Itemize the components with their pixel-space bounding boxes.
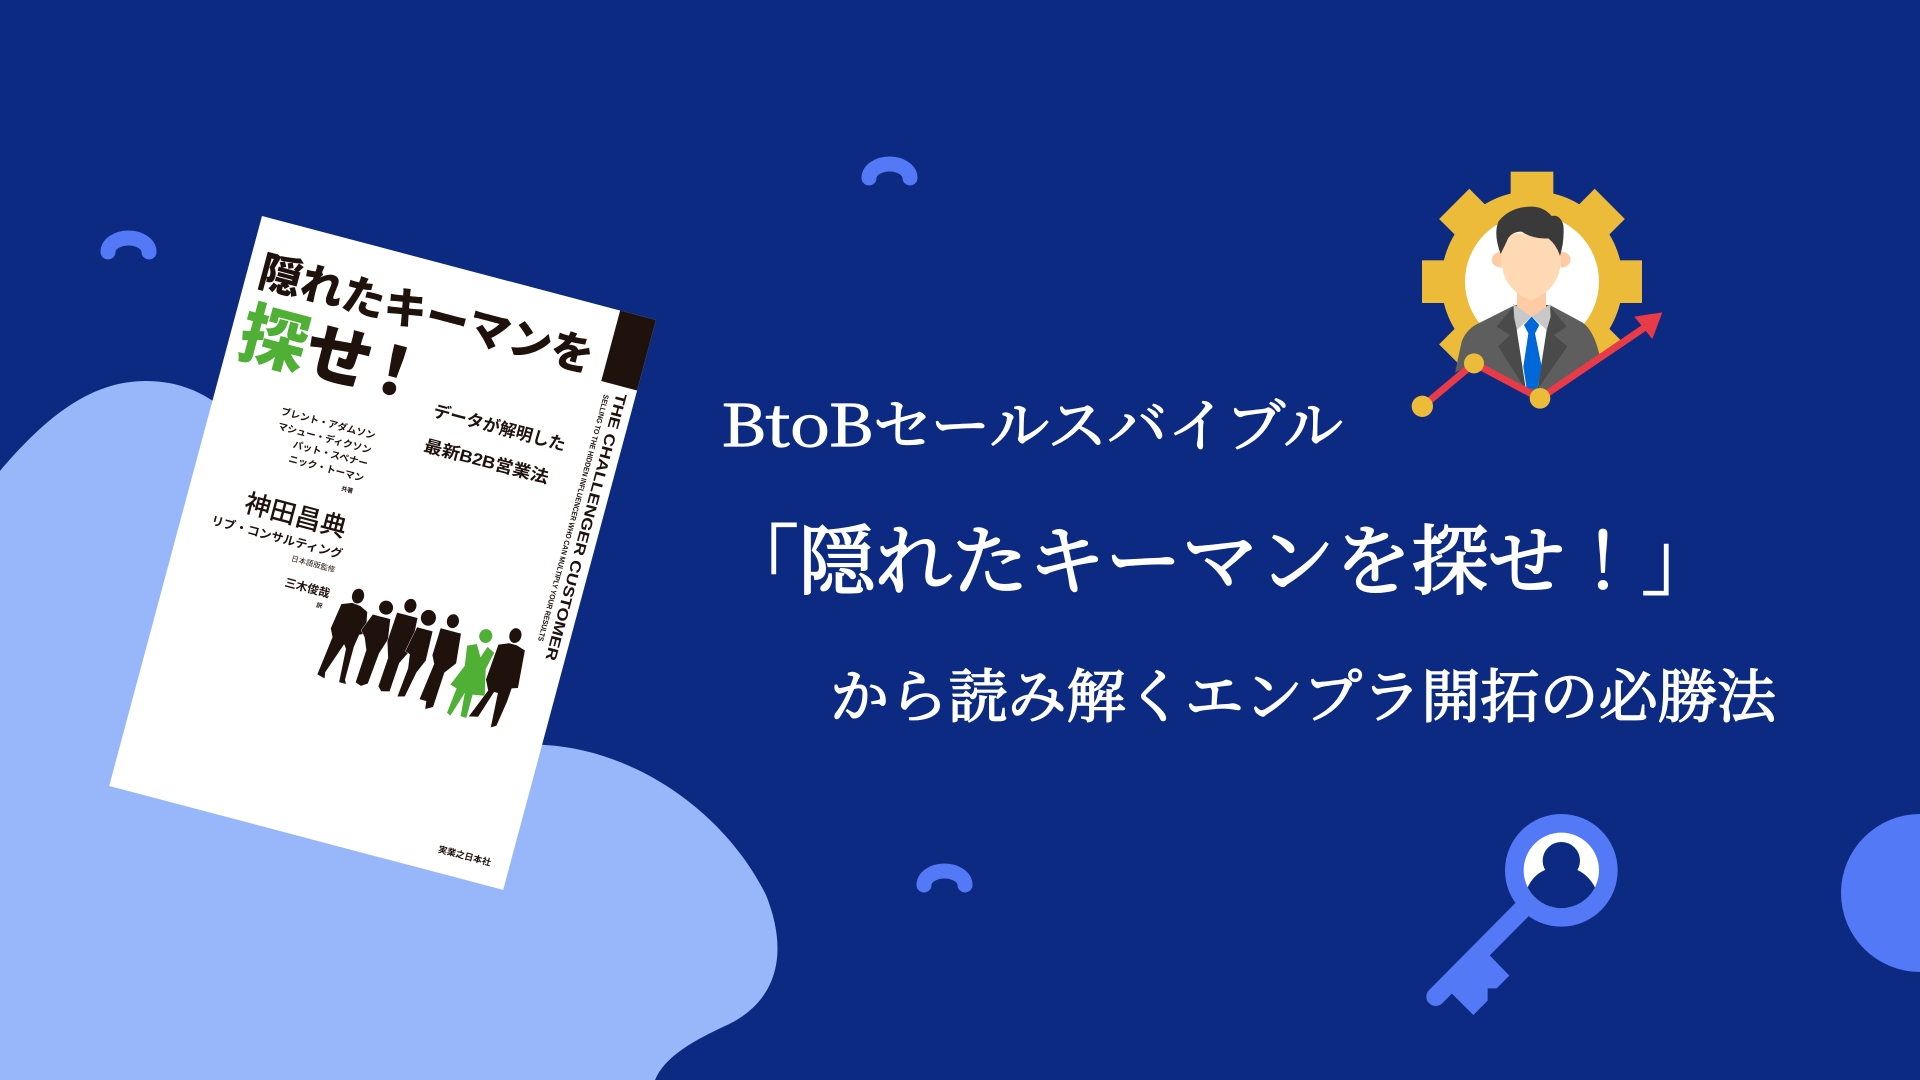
silhouette body xyxy=(1528,870,1595,908)
person 7 xyxy=(468,622,533,731)
spine english title: THE CHALLENGER CUSTOMER xyxy=(541,391,629,663)
chart point 3 xyxy=(1530,388,1550,409)
supervisor name: 神田昌典 xyxy=(241,488,350,543)
suit xyxy=(1455,305,1599,398)
arrowhead xyxy=(1634,312,1662,339)
growth line xyxy=(1422,325,1648,407)
book title line 1: 隠れたキーマンを xyxy=(253,248,599,382)
person 6 green xyxy=(443,624,502,723)
author 2: マシュー・ディクソン xyxy=(277,419,373,457)
author 1: ブレント・アダムソン xyxy=(280,405,377,442)
author 4: ニック・トーマン xyxy=(287,453,365,485)
authors xyxy=(268,405,377,485)
left lapel xyxy=(1497,307,1526,390)
subtitle line 2: 最新B2B営業法 xyxy=(422,436,551,487)
edition note: 日本語版監修 xyxy=(290,553,337,574)
person 2 xyxy=(347,596,398,689)
person 4 xyxy=(394,607,439,701)
neck xyxy=(1517,290,1546,318)
person 5 xyxy=(417,611,468,714)
gear xyxy=(1422,172,1642,375)
translator note: 訳 xyxy=(315,601,323,610)
person 3 xyxy=(374,596,424,696)
spine english subtitle: SELLING TO THE HIDDEN INFLUENCER WHO CAN MULTIPLY YOUR RESULTS xyxy=(536,394,611,642)
shirt xyxy=(1517,317,1547,387)
supervisor firm: リブ・コンサルティング xyxy=(210,513,344,561)
person 1 xyxy=(317,584,376,685)
key bit xyxy=(1452,955,1509,1015)
ears xyxy=(1492,252,1571,268)
collar xyxy=(1513,304,1551,333)
chart point 2 xyxy=(1464,353,1484,373)
author 3: パット・スペナー xyxy=(292,439,369,470)
decorative arc bottom xyxy=(924,871,965,885)
book title line 2: 探せ！ xyxy=(232,296,436,417)
decorative circle right edge xyxy=(1841,814,1920,972)
co-author note: 共著 xyxy=(340,484,354,495)
publisher: 実業之日本社 xyxy=(437,843,492,868)
light blue blob xyxy=(0,381,777,1080)
heading line 1 xyxy=(721,379,1343,463)
silhouette head xyxy=(1543,842,1580,879)
spine block xyxy=(601,311,656,391)
businessman xyxy=(1455,207,1599,398)
person silhouette xyxy=(1528,842,1595,908)
right lapel xyxy=(1537,307,1567,390)
silhouettes xyxy=(316,581,533,731)
face xyxy=(1502,233,1561,301)
chart point 1 xyxy=(1412,396,1433,417)
key shaft xyxy=(1436,910,1522,997)
tie xyxy=(1523,317,1542,388)
icon: gear businessman with growth arrow xyxy=(1412,172,1662,417)
translator: 三木俊哉 xyxy=(283,575,332,601)
cover page xyxy=(109,216,656,890)
icon: key with person xyxy=(1436,814,1618,1015)
latin part: BtoB xyxy=(721,379,873,463)
decorative arc top xyxy=(869,164,910,178)
key window xyxy=(1524,833,1599,908)
decorative arc left xyxy=(108,238,149,252)
subtitle: データが解明した xyxy=(431,401,568,455)
heading line 2: 「隠れたキーマンを探せ！」 xyxy=(722,501,1718,610)
key ring xyxy=(1505,814,1618,927)
book cover xyxy=(109,216,656,890)
hair xyxy=(1496,207,1564,256)
heading line 3: から読み解くエンプラ開拓の必勝法 xyxy=(830,650,1778,734)
katakana part: セールスバイブル xyxy=(873,379,1343,463)
gear centre xyxy=(1465,215,1599,349)
